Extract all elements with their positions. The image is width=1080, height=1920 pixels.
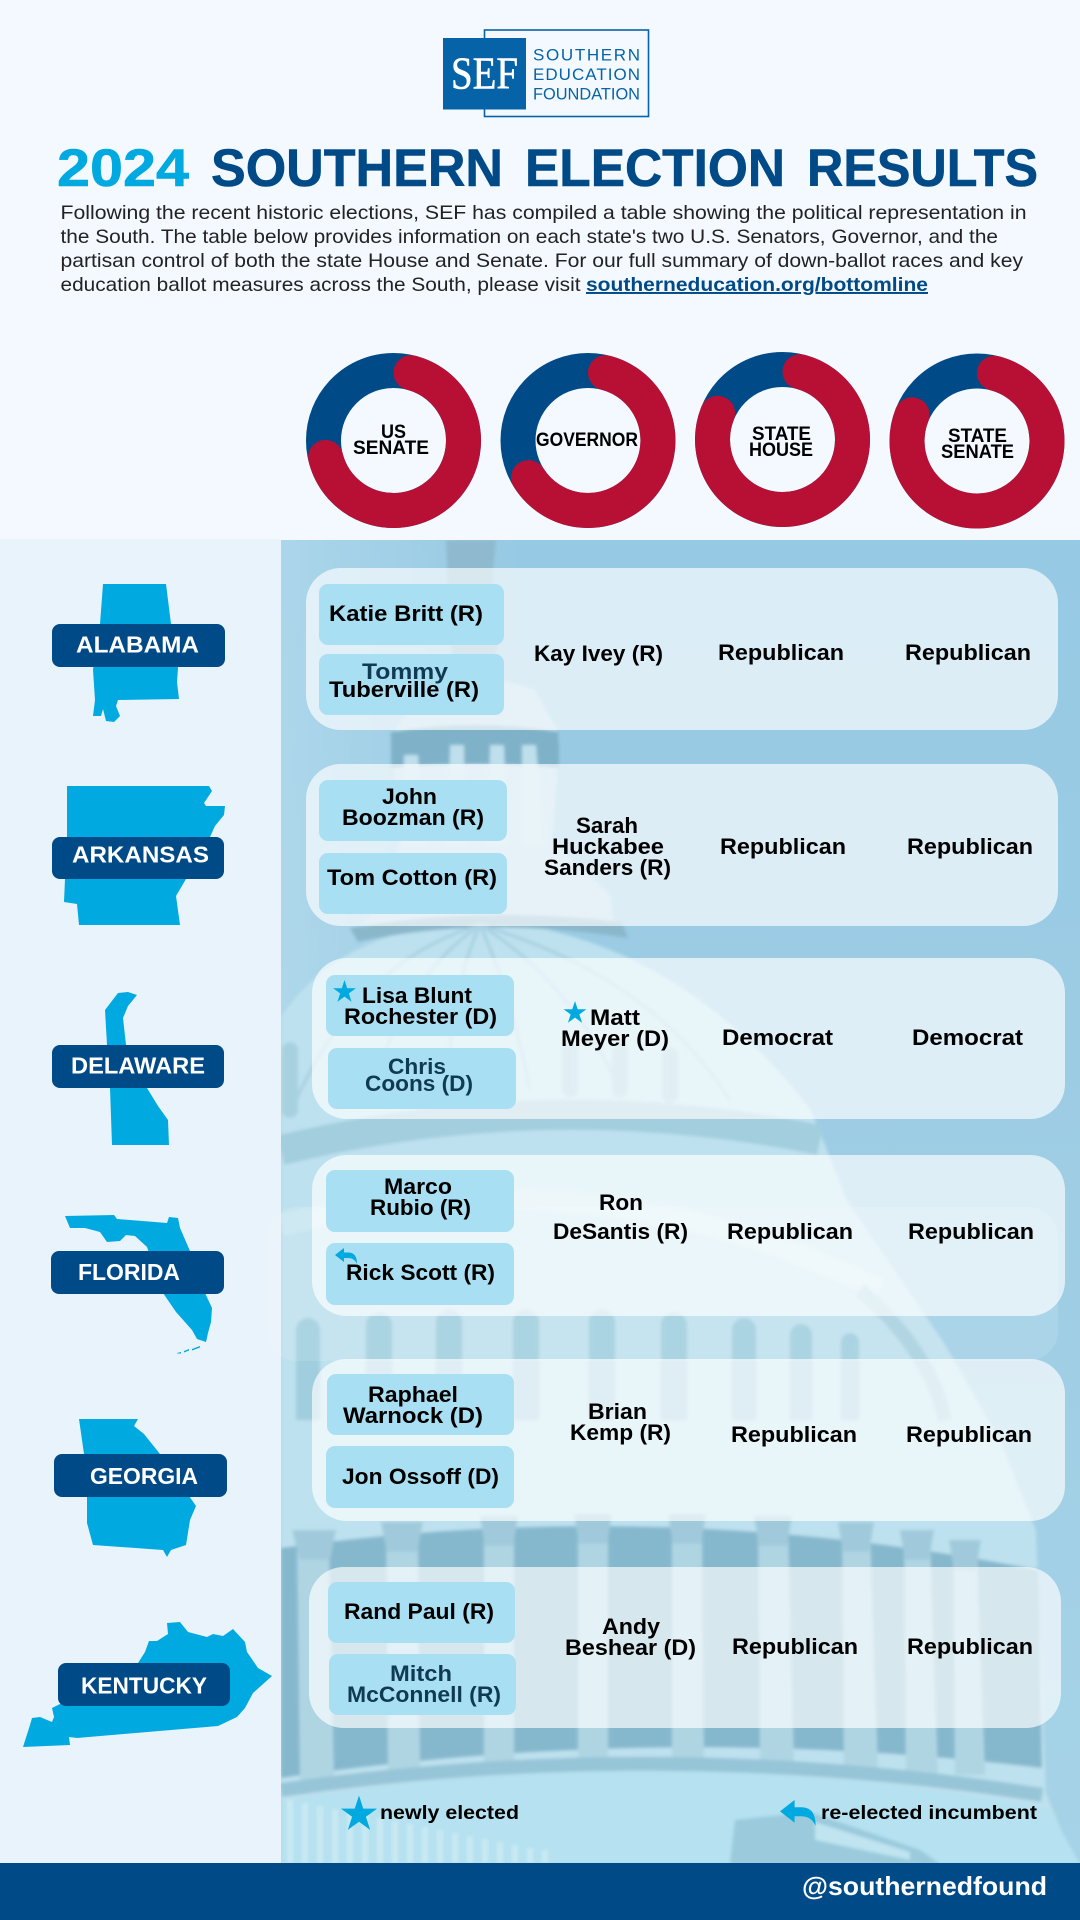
row: Arkansas: Boozman (R) [342, 805, 484, 830]
state: Alabama [52, 584, 225, 722]
state: Florida [51, 1215, 224, 1354]
row: Kentucky [309, 1567, 1061, 1728]
row: Kentucky: Andy [602, 1614, 661, 1639]
row: Florida: Republican [908, 1219, 1034, 1244]
row: Arkansas: Tom Cotton (R) [327, 865, 497, 890]
row: Alabama [306, 568, 1058, 730]
state: Arkansas [52, 786, 225, 925]
row: Kentucky: Mitch [390, 1661, 452, 1686]
state: Delaware: DELAWARE [71, 1052, 205, 1078]
row: Kentucky: Republican [732, 1634, 858, 1659]
state: Alabama: ALABAMA [76, 632, 199, 658]
row: Georgia: Jon Ossoff (D) [342, 1464, 499, 1489]
state: Florida: FLORIDA [78, 1259, 180, 1285]
intro paragraph: southerneducation.org/bottomline [586, 274, 928, 296]
state: Georgia: GEORGIA [90, 1463, 198, 1489]
row: Arkansas: Sarah [576, 813, 638, 838]
row: Arkansas: Huckabee [552, 834, 664, 859]
state: Kentucky: KENTUCKY [81, 1672, 207, 1698]
row: Delaware: Democrat [912, 1025, 1024, 1050]
logo: Southern Education Foundation [443, 30, 648, 116]
row: Delaware [312, 958, 1065, 1119]
footer bar [0, 1863, 1080, 1920]
row: Georgia: Brian [588, 1399, 647, 1424]
title: SOUTHERN [211, 139, 503, 198]
legend: newly elected [341, 1796, 519, 1830]
donut chart: State House [712, 370, 853, 510]
row: Florida: Marco [384, 1174, 452, 1199]
row: Kentucky: Rand Paul (R) [344, 1599, 494, 1624]
row: Delaware: Meyer (D) [561, 1026, 669, 1051]
row: Georgia [312, 1359, 1065, 1521]
legend: newly elected: newly elected [380, 1802, 519, 1824]
row: Florida: Rubio (R) [370, 1195, 471, 1220]
title: ELECTION [525, 139, 785, 198]
row: Arkansas: Sanders (R) [544, 855, 671, 880]
intro paragraph: Following the recent historic elections, SEF has compiled a table showing the political representation in [60, 202, 1026, 224]
row: Delaware: Coons (D) [365, 1071, 473, 1096]
donut chart: State House: HOUSE [749, 439, 813, 461]
row: Delaware: Chris [388, 1054, 446, 1079]
donut chart: US Senate [324, 370, 464, 510]
intro paragraph [60, 202, 1026, 296]
footer bar: @southernedfound [802, 1871, 1047, 1901]
left states panel [0, 539, 281, 1864]
row: Florida: DeSantis (R) [553, 1219, 688, 1244]
donut chart: Governor: GOVERNOR [536, 429, 638, 451]
icon: star newly elected senator [333, 980, 356, 1002]
donut chart: State Senate [907, 371, 1047, 511]
intro paragraph: partisan control of both the state House and Senate. For our full summary of down-ballot races and key [60, 250, 1023, 272]
row: Georgia: Kemp (R) [570, 1420, 671, 1445]
donut chart: State Senate: STATE [948, 425, 1007, 447]
icon: star newly elected governor [564, 1001, 586, 1023]
row: Arkansas: Republican [720, 834, 846, 859]
logo: Southern Education Foundation: EDUCATION [533, 65, 640, 84]
row: Georgia: Raphael [368, 1382, 458, 1407]
logo: Southern Education Foundation: FOUNDATION [533, 84, 640, 104]
row: Alabama: Tommy [362, 659, 449, 684]
row: Kentucky: McConnell (R) [347, 1682, 501, 1707]
legend: re-elected incumbent: re-elected incumbent [821, 1802, 1038, 1824]
donut chart: State House: STATE [752, 423, 811, 445]
row: Delaware: Matt [590, 1005, 641, 1030]
row: Alabama: Kay Ivey (R) [534, 641, 663, 666]
row: Arkansas: John [382, 784, 437, 809]
row: Florida: Ron [599, 1190, 643, 1215]
donut chart: US Senate: SENATE [353, 437, 429, 459]
row: Georgia: Republican [731, 1422, 857, 1447]
state: Georgia [54, 1419, 227, 1557]
donut chart: State Senate: SENATE [941, 441, 1014, 463]
row: Alabama: Tuberville (R) [329, 677, 479, 702]
capitol background image [281, 539, 1080, 1864]
logo: Southern Education Foundation: SOUTHERN [533, 46, 640, 64]
row: Delaware: Democrat [722, 1025, 834, 1050]
intro paragraph: education ballot measures across the South, please visit [60, 274, 581, 296]
legend: re-elected incumbent [780, 1800, 1038, 1826]
title: 2024 [57, 139, 190, 198]
title [57, 139, 1038, 198]
state: Delaware [52, 992, 224, 1145]
row: Kentucky: Beshear (D) [565, 1635, 696, 1660]
row: Florida: Rick Scott (R) [346, 1260, 495, 1285]
row: Georgia: Republican [906, 1422, 1032, 1447]
row: Delaware: Rochester (D) [344, 1004, 497, 1029]
donut chart: US Senate: US [381, 421, 406, 443]
row: Delaware: Lisa Blunt [362, 983, 473, 1008]
intro paragraph: the South. The table below provides information on each state's two U.S. Senators, Governor, and the [60, 226, 998, 248]
row: Kentucky: Republican [907, 1634, 1033, 1659]
logo: Southern Education Foundation: SEF [451, 48, 518, 98]
icon: arrow re-elected incumbent [335, 1248, 357, 1264]
row: Alabama: Republican [718, 640, 844, 665]
title: RESULTS [807, 139, 1038, 198]
faint translucent band [267, 1207, 1058, 1361]
donut chart: Governor [518, 370, 658, 510]
state: Kentucky [23, 1622, 272, 1747]
row: Arkansas: Republican [907, 834, 1033, 859]
row: Florida: Republican [727, 1219, 853, 1244]
row: Alabama: Katie Britt (R) [329, 601, 483, 626]
row: Georgia: Warnock (D) [343, 1403, 483, 1428]
row: Alabama: Republican [905, 640, 1031, 665]
row: Florida [312, 1155, 1065, 1316]
row: Arkansas [306, 764, 1058, 926]
state: Arkansas: ARKANSAS [72, 842, 209, 868]
